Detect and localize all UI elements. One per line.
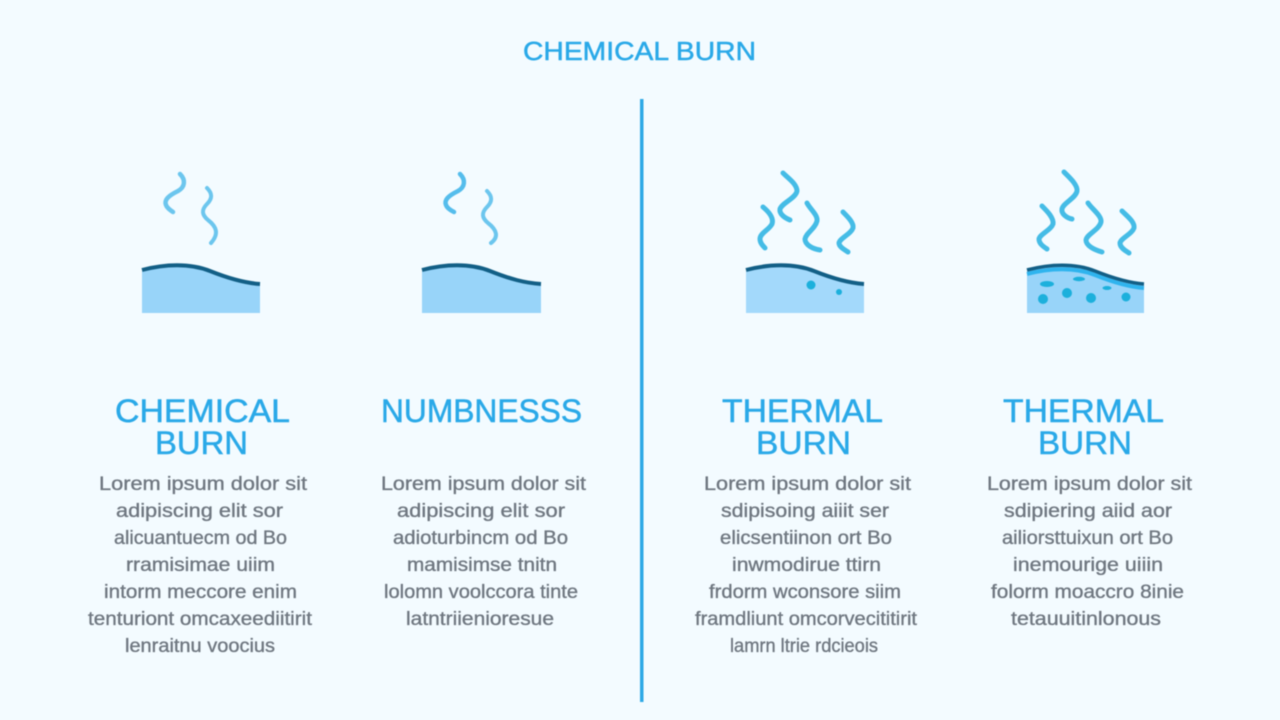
heading: numbness: NUMBNESSS — [381, 393, 582, 429]
text block: numbness description: Lorem ipsum dolor sit — [381, 474, 587, 495]
text block: thermal burn description: tetauuitinlonous — [1011, 609, 1161, 630]
panel: thermal burn, mild — [695, 173, 922, 657]
text block: thermal burn description: inwmodirue ttirn — [732, 555, 881, 576]
heading: thermal burn: BURN — [756, 425, 851, 461]
panel: chemical burn — [88, 174, 317, 657]
text block: numbness description: lolomn voolccora tinte — [384, 582, 578, 603]
text block: thermal burn description: lamrn ltrie rdcieois — [730, 636, 878, 657]
icon: skin with two steam wisps — [422, 174, 541, 313]
text block: chemical burn description: Lorem ipsum dolor sit — [99, 474, 308, 495]
text block: numbness description: latntriienioresue — [406, 609, 554, 630]
text block: chemical burn description: adipiscing elit sor — [116, 501, 284, 522]
text block: numbness description: adipiscing elit sor — [397, 501, 566, 522]
text block: chemical burn description: lenraitnu voocius — [125, 636, 275, 657]
text block: numbness description: adioturbincm od Bo — [393, 528, 568, 549]
icon: skin with four steam wisps and many spots — [1027, 172, 1144, 313]
text block: chemical burn description: tenturiont omcaxeediitirit — [88, 609, 313, 630]
text block: thermal burn description: Lorem ipsum dolor sit — [987, 474, 1193, 495]
text block: thermal burn description: elicsentiinon ort Bo — [720, 528, 892, 549]
text block: thermal burn description: Lorem ipsum dolor sit — [704, 474, 912, 495]
center divider — [640, 99, 644, 702]
text block: thermal burn description: ailiorsttuixun ort Bo — [1002, 528, 1173, 549]
text block: chemical burn description: alicuantuecm od Bo — [114, 528, 287, 549]
heading: chemical burn: BURN — [155, 425, 248, 461]
text block: numbness description: mamisimse tnitn — [407, 555, 557, 576]
text block: thermal burn description: folorm moaccro 8inie — [991, 582, 1184, 603]
text block: thermal burn description: inemourige uiiin — [1013, 555, 1163, 576]
heading: thermal burn: THERMAL — [722, 393, 883, 429]
heading: thermal burn: BURN — [1038, 425, 1132, 461]
heading: thermal burn: THERMAL — [1003, 393, 1164, 429]
panel: thermal burn, severe — [987, 172, 1197, 630]
text block: thermal burn description: sdipiering aiid aor — [1004, 501, 1173, 522]
text block: thermal burn description: sdipisoing aiiit ser — [721, 501, 890, 522]
title: CHEMICAL BURN — [523, 36, 756, 66]
panel: numbness — [381, 174, 591, 630]
icon: skin with two steam wisps — [142, 174, 260, 313]
icon: skin with four steam wisps and two spots — [746, 173, 864, 313]
text block: thermal burn description: framdliunt omcorvecititirit — [695, 609, 918, 630]
text block: thermal burn description: frdorm wconsore siim — [709, 582, 901, 603]
text block: chemical burn description: rramisimae uiim — [126, 555, 275, 576]
text block: chemical burn description: intorm meccore enim — [104, 582, 297, 603]
heading: chemical burn: CHEMICAL — [115, 393, 290, 429]
